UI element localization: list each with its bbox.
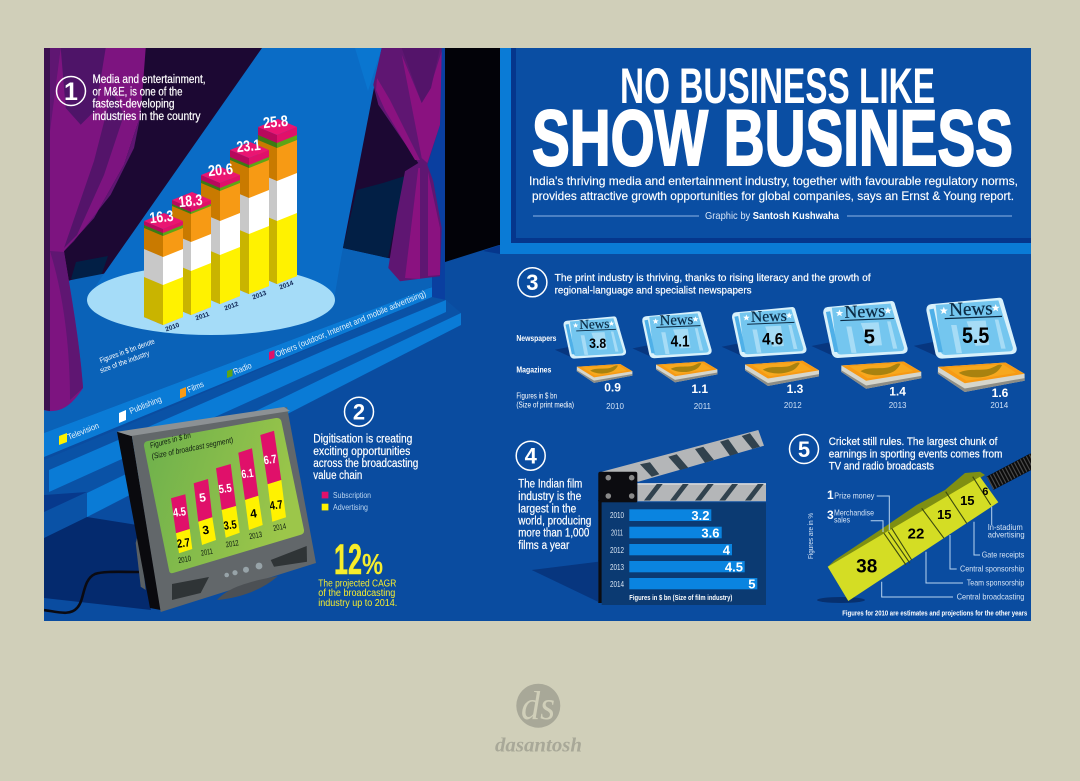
step three: number badge: 3 [526,270,539,295]
legend: industry segments: Films [186,379,205,395]
bar 2010 [144,213,183,325]
tv bar values: 3.5 [223,517,238,533]
curtain: right [373,48,442,281]
labels: earnings categories: Central broadcasting [957,592,1025,602]
panel: main blue poster [44,48,1034,621]
labels: earnings categories: Team sponsorship [967,578,1025,588]
magazine values: 1.3 [787,382,804,396]
row labels: print media: Magazines [516,365,552,374]
bar year labels: 2012 [223,301,240,312]
tv bar values: 5 [198,490,207,505]
legend: subscription and advertising: Advertising [333,503,368,512]
icon: cricket bat chart [817,460,1034,603]
tv bar values: 4 [249,506,258,521]
note: figures denote industry size: size of the industry [99,349,151,375]
film bars [629,509,757,589]
tv bar values: 4.5 [172,504,187,520]
curtain: left [44,48,146,411]
icon: newspaper 2014: 5.5 [962,323,989,348]
text: digitisation: exciting opportunities [313,446,411,458]
bar year labels: 2013 [251,290,268,301]
text: print industry: regional-language and specialist newspapers [555,285,752,297]
bar year labels: 2014 [278,280,295,291]
text: indian film industry: largest in the [518,503,576,515]
print year labels: 2012 [784,401,802,410]
bar 2013 [230,142,269,294]
icon: magazine 2010 [577,364,632,383]
title line one: NO BUSINESS LIKE [620,58,935,114]
text: cricket still rules: Cricket still rules. The largest chunk of [829,436,998,448]
logo: dasantosh watermark: dasantosh [495,735,582,757]
labels: earnings categories: Gate receipts [982,550,1024,560]
tv stacked bars [171,431,286,553]
tv bar values: 5.5 [218,481,233,496]
note: figures in percent: Figures are in % [806,513,815,559]
text: digitisation [313,434,418,482]
bar year labels [164,280,295,333]
bar year labels: 2010 [164,322,181,333]
magazine values: 1.6 [992,386,1009,400]
footnote: Figures for 2010 are estimates and projections for the other years [842,609,1027,618]
film chart caption: Figures in $ bn (Size of film industry) [629,593,733,602]
text: media and entertainment [92,74,206,123]
magazine values: 1.4 [889,385,906,399]
callout: 12 percent CAGR: of the broadcasting [318,588,395,599]
bar 2011 [172,192,211,315]
print year labels: 2010 [606,402,624,411]
icon: television with broadcast chart [44,407,316,613]
logo: dasantosh watermark [495,683,582,757]
icon: newspaper 2013: News [844,300,885,322]
legend: industry segments: Television [66,420,101,442]
bat segment values: 15 [960,493,975,508]
tv bar values: 6.7 [263,452,278,467]
tv year labels: 2012 [225,538,240,549]
icon: film clapperboard with bar chart [532,430,766,605]
bar year labels: 2011 [195,311,211,322]
icon: newspaper 2011: News [659,312,694,329]
tv year labels: 2013 [248,530,263,541]
tv bar values: 4.7 [269,497,284,513]
text: media and entertainment: or M&E, is one of the [92,86,182,98]
labels: earnings categories: advertising [988,530,1025,540]
text: media and entertainment: Media and entertainment, [92,74,206,86]
step one: number badge: 1 [64,78,78,106]
film bar values: 5 [748,576,756,592]
text: media and entertainment: fastest-developing [92,98,174,110]
film bar values: 3.6 [701,526,720,540]
callout: 12 percent CAGR: The projected CAGR [318,579,396,590]
row labels: print media [516,334,574,410]
step five: number badge: 5 [798,437,810,462]
icon: magazine 2011 [656,362,717,382]
tv bar values: 3 [201,523,210,537]
icon: newspaper 2010: News [579,316,610,332]
text: media and entertainment: industries in the country [92,111,201,123]
icon: magazine 2013 [841,362,921,389]
bar total values: 25.8 [262,113,289,132]
step three: number badge [518,268,547,297]
text: cricket still rules [829,436,1002,472]
film year labels: 2010 [610,511,624,520]
film year labels: 2013 [610,563,624,572]
text: print industry [555,272,871,297]
bat segment values: 38 [856,556,877,578]
icon: newspaper 2013 [811,300,908,358]
bar total values: 18.3 [178,192,204,211]
tv chart title: Figures in $ bn [149,431,192,450]
legend: subscription and advertising: Subscription [333,491,371,500]
bar 2012 [201,167,240,304]
text: digitisation: Digitisation is creating [313,434,412,446]
row labels: print media: (Size of print media) [516,401,574,410]
icon: newspaper 2011 [632,311,712,358]
text: indian film industry: world, producing [517,515,591,527]
subtitle: provides attractive growth opportunities for global companies, says an Ernst & Young report. [532,189,1014,203]
note: figures denote industry size: Figures in $ bn denote [98,337,156,365]
legend: industry segments [59,288,427,445]
row labels: print media: Newspapers [516,334,557,343]
print year labels: 2014 [990,401,1009,410]
row labels: print media: Figures in $ bn [516,391,557,400]
icon: newspaper 2011: 4.1 [671,333,690,350]
magazine values: 1.1 [691,382,708,396]
icon: newspaper 2012 [722,307,807,357]
labels: earnings categories: Central sponsorship [960,564,1025,574]
text: print industry: The print industry is thriving, thanks to rising literacy and the growth of [555,272,871,284]
film bar values: 4 [723,542,731,558]
step one: number badge [56,76,86,106]
labels: earnings categories: 3 [827,508,834,522]
icon: newspaper 2010 [555,316,626,359]
film year labels [610,511,624,589]
callout: 12 percent CAGR [318,544,396,608]
film year labels: 2012 [610,546,624,555]
magazine values [604,380,1009,400]
tv bar values: 6.1 [241,466,255,481]
film year labels: 2014 [610,580,624,589]
bar 2014 [258,119,297,284]
credit line: Graphic by Santosh Kushwaha [705,210,839,222]
legend: industry segments: Radio [232,360,253,377]
print year labels [606,401,1009,411]
legend: industry segments: Others (outdoor, Internet and mobile advertising) [274,288,427,359]
bar total values: 23.1 [236,137,262,156]
text: digitisation: value chain [313,470,362,482]
bar total values [149,113,289,227]
labels: earnings categories [827,488,1025,602]
magazine values: 0.9 [604,380,621,394]
text: indian film industry [517,479,591,552]
icon: newspaper 2010: 3.8 [589,335,606,351]
callout: 12 percent CAGR: industry up to 2014. [318,598,397,609]
icon: newspaper 2014 [914,298,1017,359]
tv year labels: 2010 [177,554,192,565]
callout: 12 percent CAGR: 12 [334,536,362,584]
subtitle [529,174,1018,203]
icon: magazine 2012 [745,361,819,386]
callout: 12 percent CAGR: % [362,549,383,581]
film year labels: 2011 [611,528,623,538]
icon: newspaper 2013: 5 [864,326,875,348]
tv year labels: 2011 [200,547,214,558]
print year labels: 2013 [889,401,907,410]
step two: number badge [344,397,374,426]
tv year labels: 2014 [272,522,287,533]
icon: newspaper 2012: News [751,308,787,326]
bat segment values: 6 [982,486,988,498]
leader lines: bat chart [871,496,992,597]
print year labels: 2011 [694,402,712,411]
step five: number badge [790,434,818,464]
tv year labels [177,522,287,565]
step four: number badge [516,441,545,470]
film bar values: 4.5 [725,560,743,574]
panel: stage scene [44,48,500,610]
film bar values [691,508,756,592]
text: cricket still rules: TV and radio broadcasts [829,460,934,472]
legend: subscription and advertising [322,491,371,512]
tv chart title: (Size of broadcast segment) [151,435,234,461]
legend: industry segments: Publishing [128,394,163,416]
step four: number badge: 4 [525,444,538,468]
logo: dasantosh watermark: ds [521,683,555,728]
text: digitisation: across the broadcasting [313,458,418,470]
panel: title header [500,48,1031,254]
step two: number badge: 2 [353,400,365,424]
tv bar values: 2.7 [176,535,191,551]
labels: earnings categories: 1 [827,488,834,502]
bat segment values [856,486,988,578]
tv bar values [172,452,284,551]
bat segment values: 15 [937,507,952,522]
labels: earnings categories: sales [834,515,850,525]
labels: earnings categories: Merchandise [834,508,874,518]
tv screen [144,418,304,573]
icon: magazine 2014 [938,362,1025,392]
bat segment values: 22 [908,526,924,542]
subtitle: India's thriving media and entertainment industry, together with favourable regulatory norms, [529,174,1018,188]
spotlight pool [87,265,335,335]
icon: newspaper 2014: News [949,298,993,321]
text: indian film industry: films a year [518,540,569,552]
labels: earnings categories: In-stadium [988,522,1023,532]
labels: earnings categories: Prize money [834,490,875,500]
icon: newspaper 2012: 4.6 [762,331,783,349]
bar total values: 16.3 [149,208,175,227]
film bar values: 3.2 [691,508,710,523]
text: indian film industry: more than 1,000 [518,528,589,540]
text: cricket still rules: earnings in sporting events comes from [829,449,1002,461]
bar chart: media and entertainment size [144,113,297,333]
text: indian film industry: industry is the [518,491,581,503]
bar total values: 20.6 [207,161,234,180]
text: indian film industry: The Indian film [518,479,582,491]
